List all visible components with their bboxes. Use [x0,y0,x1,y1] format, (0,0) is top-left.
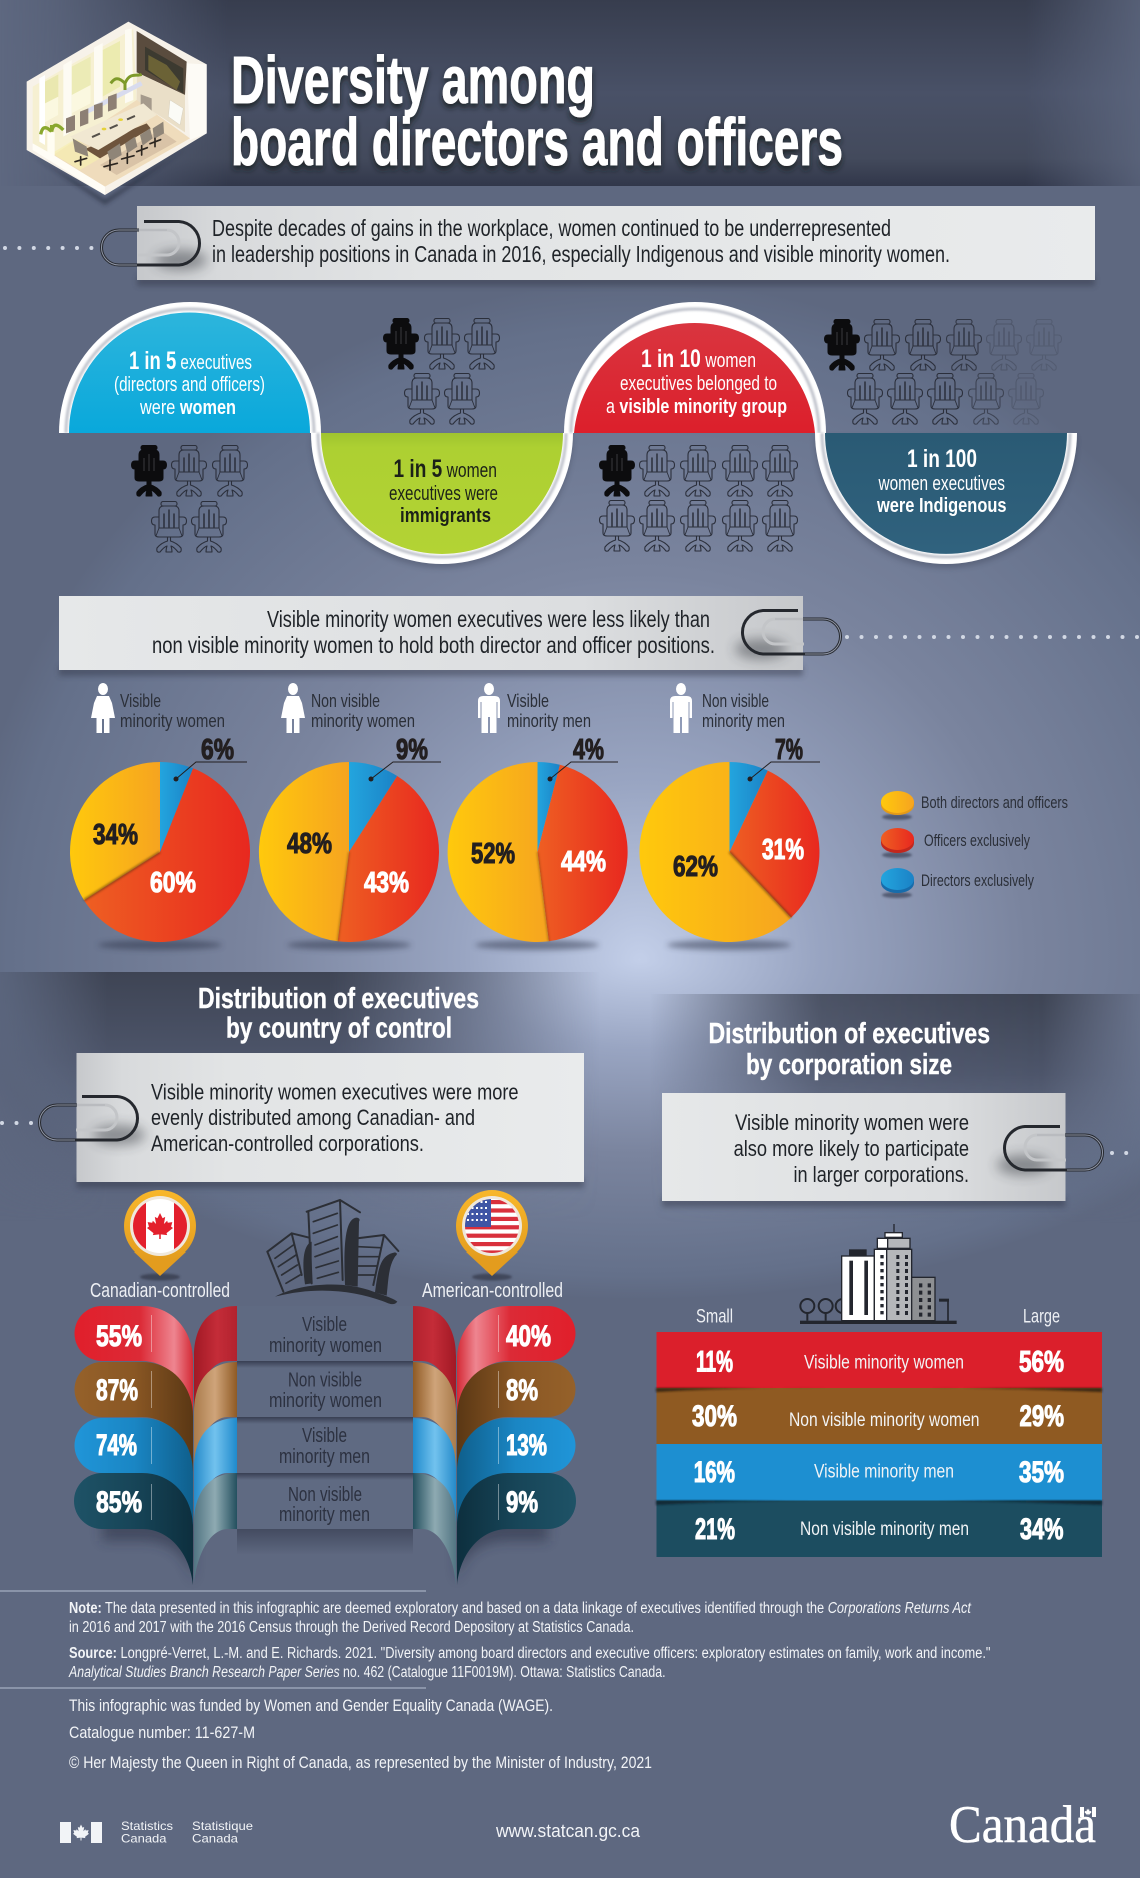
pie: visible minority women: 6% [201,734,234,766]
title: Diversity among [231,43,595,118]
logo: Statistics Canada: Canada [192,1832,238,1846]
callout: country of control: Visible minority women executives were more [151,1080,518,1105]
panel: ribbon centre labels: minority men [279,1504,370,1526]
funding and catalogue text: © Her Majesty the Queen in Right of Canada, as represented by the Minister of Industry, 2021 [69,1753,652,1772]
panel: indigenous 1 in 100: women executives [878,472,1005,495]
header band [0,0,1140,186]
icon: American flag pin [456,1190,528,1280]
legend: Both directors and officers [921,794,1068,812]
table: corporation size bands: 34% [1020,1513,1064,1546]
person icon [91,683,115,733]
percent values: Canadian-controlled: 87% [96,1374,138,1407]
table: corporation size bands: 56% [1019,1346,1064,1378]
pie: visible minority women [70,683,250,950]
pie: non visible minority women: 48% [287,828,332,860]
note and source: Analytical Studies Branch Research Paper Series no. 462 (Catalogue 11F0019M). Ottawa: Statistics Canada. [68,1664,665,1681]
heading: corporation size [708,1018,990,1081]
panel: women 1 in 5 [59,302,321,433]
note and source [0,1591,990,1688]
percent values: American-controlled: 40% [506,1320,551,1353]
pie: non visible minority women: Non visible [311,690,380,711]
funding and catalogue text [69,1696,652,1772]
pie: non visible minority women [259,683,441,950]
heading: corporation size: Distribution of executives [708,1018,990,1050]
section band: corporation size [662,994,1140,1161]
panel: immigrants 1 in 5: immigrants [400,504,491,527]
logo: Statistics Canada: Statistique [192,1819,253,1833]
heading: country of control: by country of control [226,1012,452,1044]
legend [881,791,1068,898]
pie: visible minority men: 52% [471,838,515,870]
title [231,43,843,180]
pin labels: Canadian-controlled [90,1280,230,1302]
table: corporation size bands: 35% [1019,1456,1064,1489]
heading: country of control: Distribution of executives [198,983,479,1015]
pie: non visible minority men: Non visible [702,690,769,711]
table: corporation size bands: Non visible minority women [789,1409,980,1431]
pie: non visible minority men: 62% [673,851,718,883]
percent values: Canadian-controlled: 55% [96,1320,142,1353]
percent values: Canadian-controlled: 85% [96,1486,142,1519]
ribbons: American-controlled [413,1306,576,1585]
percent values: American-controlled [506,1320,551,1519]
pie: visible minority men: Visible [507,690,549,711]
panel: indigenous 1 in 100: 1 in 100 [907,445,977,473]
percent values: Canadian-controlled [96,1320,142,1519]
legend: Directors exclusively [921,872,1035,890]
pie: non visible minority men: minority men [702,710,785,731]
intro callout: Despite decades of gains in the workplace, women continued to be underrepresented [212,215,891,241]
pie: visible minority women: 60% [150,867,196,899]
table: corporation size bands: Visible minority women [804,1352,964,1374]
callout: country of control: evenly distributed among Canadian- and [151,1105,475,1130]
legend: Officers exclusively [924,832,1031,850]
pie: visible minority men [448,683,628,950]
icon: paperclip [735,610,840,659]
table: corporation size bands: 11% [696,1346,733,1378]
pie: non visible minority men: 7% [775,734,803,766]
size labels: Small [696,1306,733,1328]
percent values: American-controlled: 13% [506,1429,547,1462]
icon: paperclip [997,1126,1102,1175]
icon: paperclip [40,1096,145,1145]
person icon [670,683,692,733]
icon: office building [800,1224,957,1324]
pie: visible minority men: 4% [573,734,604,766]
panel: immigrants 1 in 5 [311,433,573,568]
callout: corporation size: in larger corporations. [794,1162,969,1187]
logo: Statistics Canada: Statistics [121,1819,173,1833]
table: corporation size bands: 29% [1020,1400,1064,1433]
panel: visible minority 1 in 10: 1 in 10 women [641,345,756,373]
funding and catalogue text: This infographic was funded by Women and Gender Equality Canada (WAGE). [69,1696,553,1715]
panel: ribbon centre labels: minority women [269,1390,382,1412]
pie: non visible minority women: 43% [364,867,409,899]
table: corporation size bands: 16% [694,1456,735,1489]
callout: country of control [2,1053,584,1188]
panel: women 1 in 5: 1 in 5 executives [129,347,252,375]
panel: immigrants 1 in 5: executives were [389,482,498,505]
panel: immigrants 1 in 5: 1 in 5 women [394,455,497,483]
panel: ribbon centre labels: minority women [269,1335,382,1357]
panel: visible minority 1 in 10: a visible minority group [606,395,787,418]
section band: country of control [0,972,584,1130]
intro callout: in leadership positions in Canada in 2016, especially Indigenous and visible minority women. [212,241,950,267]
pie: visible minority women: minority women [120,710,225,731]
panel: ribbon centre labels: Non visible [288,1484,362,1506]
panel: women 1 in 5: (directors and officers) [114,373,265,396]
pie: visible minority men: minority men [507,710,591,731]
panel: ribbon centre labels: Non visible [288,1370,362,1392]
pie: non visible minority women: minority women [311,710,415,731]
title: board directors and officers [231,105,843,180]
callout: positions: non visible minority women to hold both director and officer positions. [152,632,715,658]
pie: non visible minority men: 31% [762,834,804,866]
panel: ribbon centre labels: Visible [302,1425,347,1447]
panel: visible minority 1 in 10: executives belonged to [620,372,777,395]
pie: visible minority women: 34% [93,819,138,851]
pin labels: American-controlled [422,1280,563,1302]
pie: visible minority men: 44% [561,846,606,878]
callout: country of control: American-controlled corporations. [151,1131,424,1156]
table: corporation size bands: Non visible minority men [800,1518,969,1540]
panel: ribbon centre labels: minority men [279,1446,370,1468]
size labels [696,1306,1060,1328]
ribbons: Canadian-controlled [74,1306,237,1585]
logo: Canada wordmark: Canada [949,1796,1096,1854]
callout: corporation size: Visible minority women were [735,1110,969,1135]
note and source: Note: The data presented in this infographic are deemed exploratory and based on a data linkage of executives identified through the Corporations Returns Act [69,1600,972,1617]
funding and catalogue text: Catalogue number: 11-627-M [69,1723,255,1742]
panel: women 1 in 5: were women [139,396,236,419]
note and source: in 2016 and 2017 with the 2016 Census through the Derived Record Depository at Statistics Canada. [69,1619,634,1636]
table: corporation size bands: 21% [695,1513,735,1546]
callout: corporation size [662,1093,1140,1207]
icon: city buildings [267,1200,398,1304]
panel: ribbon centre labels: Visible [302,1314,347,1336]
intro callout [5,206,1095,286]
heading: country of control [198,983,479,1044]
logo: Statistics Canada: Canada [121,1832,167,1846]
table: corporation size bands [656,1332,1102,1557]
heading: corporation size: by corporation size [746,1049,952,1081]
panel: indigenous 1 in 100: were Indigenous [876,494,1006,517]
pie: non visible minority men [639,683,820,950]
table: corporation size bands: 30% [692,1400,737,1433]
callout: positions [59,596,1140,676]
panel: ribbon centre labels [237,1306,413,1555]
callout: corporation size: also more likely to participate [734,1136,969,1161]
percent values: Canadian-controlled: 74% [96,1429,137,1462]
chairs: 1 in 5 immigrants [384,318,500,424]
table: corporation size bands: Visible minority men [814,1460,954,1482]
note and source: Source: Longpré-Verret, L.-M. and E. Richards. 2021. "Diversity among board directors and executive officers: exploratory estimates on family, work and income." [69,1645,990,1662]
pie: non visible minority women: 9% [396,734,428,766]
person icon [281,683,305,733]
panel: visible minority 1 in 10 [564,302,826,433]
chairs: 1 in 10 [600,446,798,551]
percent values: American-controlled: 8% [506,1374,538,1407]
chairs: 1 in 5 executives [132,446,248,552]
callout: positions: Visible minority women executives were less likely than [267,606,710,632]
percent values: American-controlled: 9% [506,1486,538,1519]
size labels: Large [1023,1306,1060,1328]
logo: Statistics Canada [60,1819,253,1846]
website url: www.statcan.gc.ca [495,1821,641,1841]
icon: boardroom hexagon [27,22,207,205]
icon: Canadian flag pin [124,1190,196,1280]
pin labels [90,1280,563,1302]
panel: indigenous 1 in 100 [815,433,1077,568]
pie: visible minority women: Visible [120,690,161,711]
icon: paperclip [102,222,207,270]
person icon [478,683,500,733]
chairs: 1 in 100 [824,320,1062,424]
